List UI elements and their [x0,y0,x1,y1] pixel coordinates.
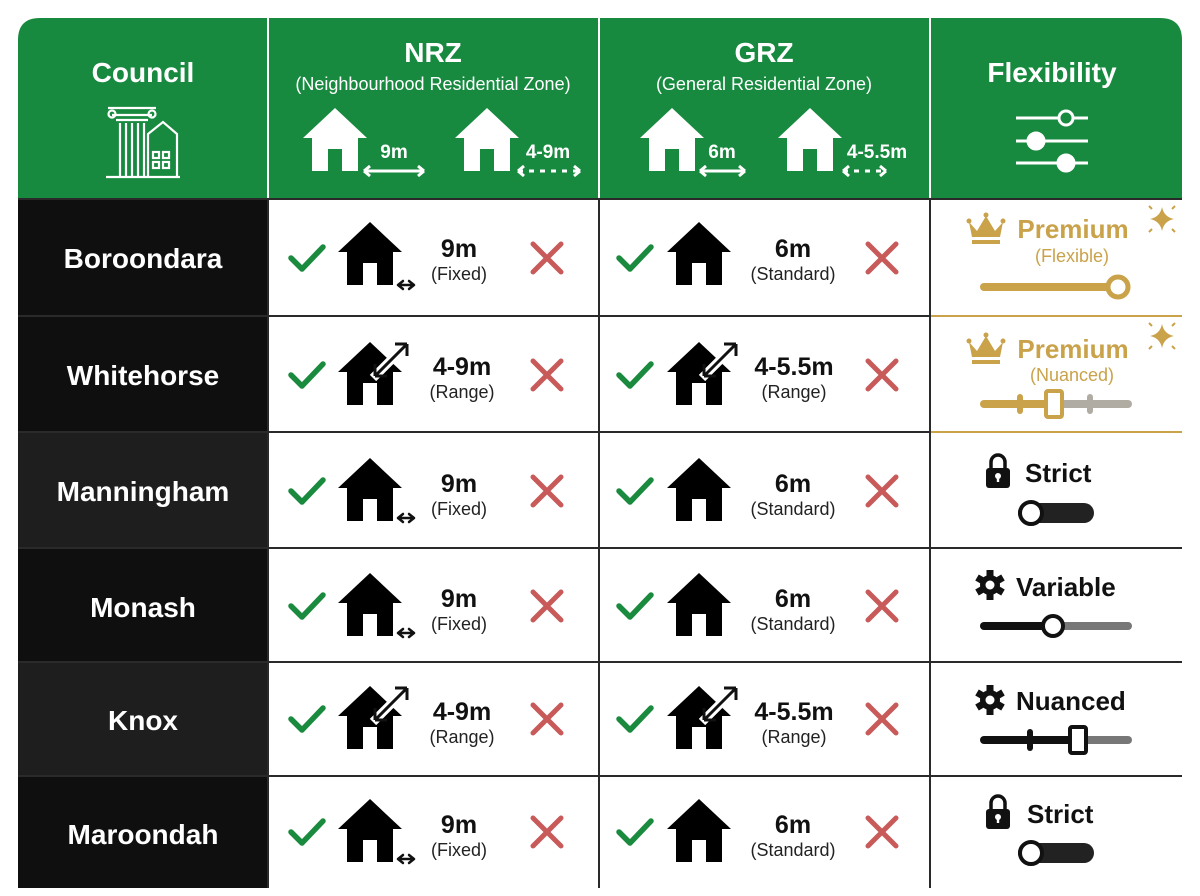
row: Maroondah: 9m [441,811,477,839]
row: Manningham: Strict [1025,458,1092,488]
row: Whitehorse: 4-5.5m [754,353,834,381]
row: Manningham: (Fixed) [431,499,487,519]
row: Boroondara: Premium [1017,214,1129,244]
header: GRZ: (General Residential Zone) [656,74,872,94]
council cells: Knox [108,705,178,736]
header: NRZ: 4-9m [526,142,570,163]
row: Maroondah [291,796,1094,864]
header: GRZ: GRZ [734,37,794,68]
row: Boroondara: 9m [441,235,477,263]
row: Maroondah: Strict [1027,799,1094,829]
row: Manningham [291,455,1094,524]
table grid background [18,198,1182,888]
header: GRZ: 4-5.5m [847,142,907,163]
row: Knox: 4-9m [433,698,491,726]
row: Knox [291,685,1128,753]
row: Whitehorse: (Range) [761,382,827,402]
council cells: Manningham [57,476,229,507]
row: Knox: (Range) [429,727,495,747]
row: Whitehorse: (Nuanced) [1030,365,1114,385]
row: Knox: (Range) [761,727,827,747]
header: Council: Council [92,57,194,88]
icon: council building [106,108,180,177]
header: NRZ: (Neighbourhood Residential Zone) [295,74,571,94]
row: Manningham: 6m [775,470,811,498]
header: NRZ [295,37,580,176]
row: Monash: (Standard) [750,614,836,634]
council cells [18,200,267,888]
row: Whitehorse: Premium [1017,334,1129,364]
header: Flexibility: Flexibility [987,57,1117,88]
header row [18,18,1182,198]
row: Monash: 6m [775,585,811,613]
row: Maroondah: (Standard) [750,840,836,860]
header: NRZ: NRZ [404,37,462,68]
row: Boroondara: (Flexible) [1035,246,1109,266]
council cells: Maroondah [68,819,218,850]
row: Monash: Variable [1016,572,1116,602]
header: GRZ [640,37,907,176]
council cells: Whitehorse [67,360,219,391]
header: Council [92,57,194,177]
header: Flexibility [987,57,1117,171]
header: NRZ: 9m [380,142,408,163]
row: Boroondara: 6m [775,235,811,263]
row: Boroondara: (Fixed) [431,264,487,284]
row: Manningham: (Standard) [750,499,836,519]
row: Boroondara [291,206,1175,297]
row: Knox: Nuanced [1016,686,1126,716]
row: Maroondah: 6m [775,811,811,839]
council cells: Boroondara [64,243,223,274]
row: Whitehorse [291,323,1175,417]
row: Monash [291,570,1128,637]
council cells: Monash [90,592,196,623]
row: Boroondara: (Standard) [750,264,836,284]
row: Maroondah: (Fixed) [431,840,487,860]
row: Monash: 9m [441,585,477,613]
row: Whitehorse: 4-9m [433,353,491,381]
row: Knox: 4-5.5m [754,698,834,726]
row: Manningham: 9m [441,470,477,498]
white cells [269,200,1182,888]
row: Whitehorse: (Range) [429,382,495,402]
header: GRZ: 6m [708,142,736,163]
row: Monash: (Fixed) [431,614,487,634]
